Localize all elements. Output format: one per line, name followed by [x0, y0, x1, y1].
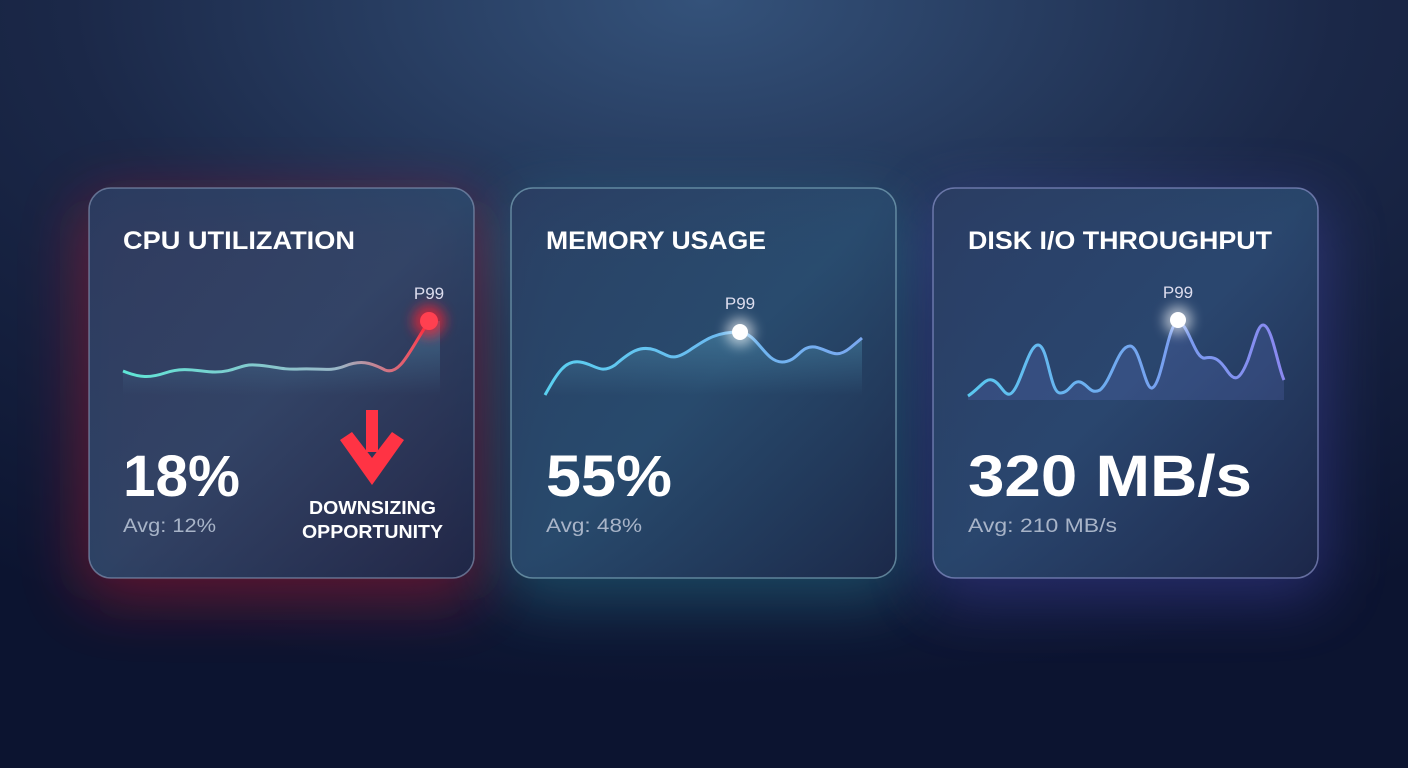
heading: CPU UTILIZATION: CPU UTILIZATION	[123, 227, 355, 255]
text: avg: Avg: 48%	[546, 516, 642, 537]
panel: Disk I/O	[933, 188, 1318, 578]
marker: P99: P99	[725, 294, 755, 313]
text: avg: Avg: 210 MB/s	[968, 516, 1117, 537]
chart: disk line	[968, 322, 1284, 400]
marker: P99: P99	[1163, 283, 1193, 302]
marker: P99 red: P99	[414, 284, 444, 303]
chart: memory line	[545, 332, 862, 395]
marker: P99	[1163, 283, 1193, 334]
text: downsizing opportunity: OPPORTUNITY	[302, 522, 443, 542]
glows	[80, 200, 480, 600]
text: downsizing opportunity	[302, 498, 443, 542]
heading: DISK I/O THROUGHPUT: DISK I/O THROUGHPUT	[968, 227, 1272, 255]
marker: P99 red	[413, 284, 445, 337]
chart: CPU line	[123, 321, 440, 395]
heading: MEMORY USAGE: MEMORY USAGE	[546, 227, 766, 255]
panel: CPU utilization	[89, 188, 474, 578]
panel: Memory usage	[511, 188, 896, 578]
value: 320 MB/s: 320 MB/s	[968, 444, 1252, 509]
value: 55%: 55%	[546, 444, 672, 509]
marker: P99	[725, 294, 755, 346]
value: 18%: 18%	[123, 444, 240, 509]
text: avg: Avg: 12%	[123, 516, 216, 537]
text: downsizing opportunity: DOWNSIZING	[309, 498, 436, 518]
icon: down arrow	[340, 410, 404, 485]
